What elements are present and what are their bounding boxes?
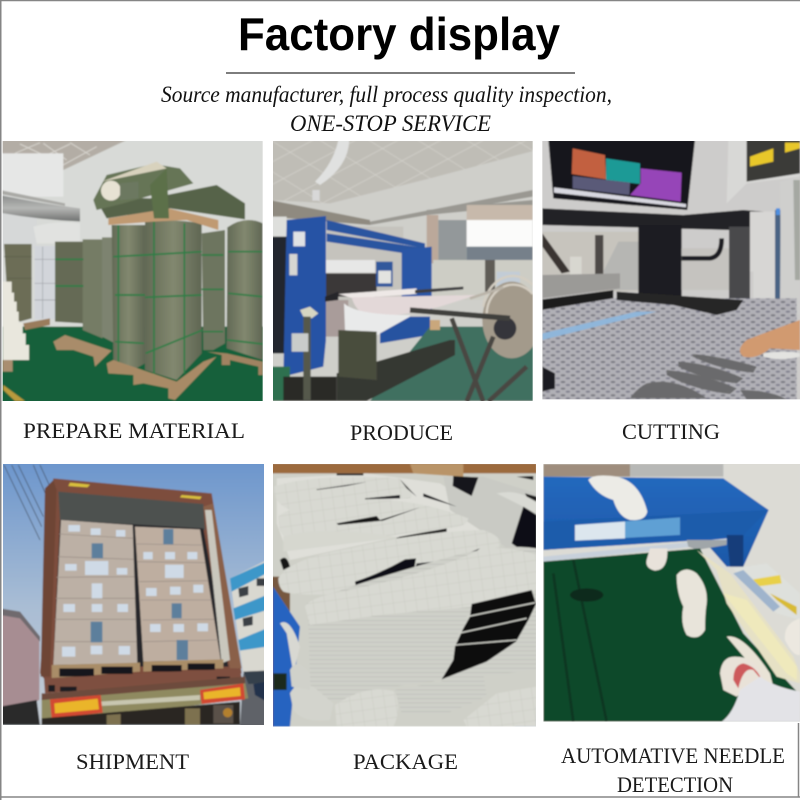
subtitle: Source manufacturer, full process quality inspection, bbox=[161, 82, 612, 107]
label: produce: PRODUCE bbox=[350, 420, 453, 445]
photo: prepare material bbox=[0, 140, 267, 407]
photo: produce bbox=[270, 140, 541, 407]
title: Factory display bbox=[238, 8, 560, 60]
label: cutting: CUTTING bbox=[622, 419, 720, 444]
title rule bbox=[226, 72, 575, 74]
label: shipment: SHIPMENT bbox=[76, 749, 190, 774]
label: automative needle detection: DETECTION bbox=[617, 772, 733, 797]
subtitle: ONE-STOP SERVICE bbox=[290, 111, 491, 136]
photo: package bbox=[270, 460, 537, 727]
label: automative needle detection bbox=[561, 743, 785, 797]
photo: needle detection bbox=[540, 460, 800, 727]
label: automative needle detection: AUTOMATIVE NEEDLE bbox=[561, 743, 785, 768]
subtitle bbox=[161, 82, 612, 136]
label: prepare material: PREPARE MATERIAL bbox=[23, 418, 245, 443]
photo: cutting bbox=[540, 140, 800, 407]
label: package: PACKAGE bbox=[353, 749, 458, 774]
photo: shipment bbox=[0, 460, 267, 727]
